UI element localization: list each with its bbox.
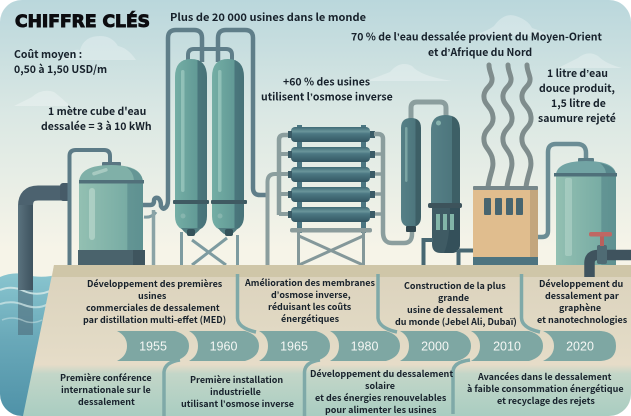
timeline text 1955: Développement des premières	[87, 277, 223, 290]
segment 1965: 1965	[280, 340, 308, 354]
timeline text 1965: d’osmose inverse,	[271, 288, 351, 301]
segment 1980	[330, 331, 400, 361]
timeline text 2010 lower: à faible consommation énergétique	[467, 382, 624, 395]
pipes behind equipment	[70, 30, 292, 265]
segment 2000: 2000	[421, 340, 449, 354]
timeline text 1955: par distillation multi-effet (MED)	[83, 313, 226, 326]
timeline text 2020: Développement du	[539, 277, 624, 290]
timeline connectors	[164, 274, 540, 416]
segment 1960	[189, 331, 259, 361]
timeline text 1980 lower: et des énergies renouvelables	[315, 391, 447, 404]
desalination tank left	[78, 162, 145, 265]
timeline text 1955: usines	[138, 289, 167, 302]
segment 1955	[117, 331, 189, 361]
membrane rack	[288, 125, 375, 265]
segment 2020	[543, 331, 616, 361]
segment 1980: 1980	[351, 340, 378, 354]
stat: saumure: 1 litre d’eau	[547, 66, 608, 81]
timeline text 1965: réduisant les coûts	[268, 300, 352, 313]
background clouds	[14, 15, 622, 106]
timeline text 1965: énergétiques	[281, 312, 340, 325]
timeline text 2000: grande	[438, 291, 469, 304]
timeline text 2010 lower: Avancées dans le dessalement	[477, 370, 612, 383]
segment 1965	[259, 331, 330, 361]
timeline text 1955: commerciales de dessalement	[86, 301, 220, 314]
stat: osmose inverse: utilisent l’osmose inverse	[261, 90, 393, 104]
stat: saumure: 1,5 litre de	[551, 96, 606, 111]
segment 2020: 2020	[566, 340, 594, 354]
timeline text 2020: et nanotechnologies	[537, 313, 628, 326]
stat: énergie: 1 mètre cube d'eau	[48, 104, 146, 119]
stat: saumure: saumure rejeté	[538, 111, 616, 126]
segment 1960: 1960	[210, 340, 237, 354]
stat: Moyen-Orient: et d’Afrique du Nord	[428, 45, 532, 60]
stat: énergie: dessalée = 3 à 10 kWh	[41, 119, 152, 134]
desalination tank right	[538, 144, 617, 265]
timeline text 2020: graphène	[559, 301, 601, 314]
stat: saumure: douce produit,	[539, 81, 615, 96]
timeline text 1980 lower: Développement du dessalement	[310, 367, 453, 380]
timeline text 1960 lower: Première installation	[190, 373, 283, 386]
timeline text 2000: usine de dessalement	[407, 303, 503, 316]
title: CHIFFRE CLÉS	[15, 10, 150, 32]
factory building	[473, 186, 538, 265]
timeline text 1965: Amélioration des membranes	[244, 276, 376, 289]
segment 1955: 1955	[139, 340, 167, 354]
valve	[589, 232, 631, 277]
segment 2010: 2010	[493, 340, 521, 354]
segment 2010	[471, 331, 543, 361]
timeline text 1955 lower: dessalement	[78, 395, 135, 408]
timeline text 2000: Construction de la plus	[404, 279, 506, 292]
big intake pipe	[18, 183, 70, 290]
timeline text 1955 lower: internationale sur le	[61, 383, 151, 396]
tall pressure vessels	[173, 59, 247, 236]
timeline text 2020: dessalement par	[545, 289, 619, 302]
stat: coût moyen: Coût moyen :	[14, 47, 82, 62]
timeline text 1960 lower: industrielle	[210, 385, 261, 398]
timeline text 1955 lower: Première conférence	[60, 371, 152, 384]
platform	[23, 265, 631, 416]
timeline text 1980 lower: pour alimenter les usines	[325, 403, 437, 416]
timeline text 2000: du monde (Jebel Ali, Dubaï)	[395, 315, 517, 328]
vessel support legs	[182, 232, 238, 265]
timeline text 1980 lower: solaire	[365, 379, 395, 392]
stat: osmose inverse: +60 % des usines	[283, 74, 370, 90]
stat: usines: Plus de 20 000 usines dans le monde	[170, 10, 366, 25]
stat: Moyen-Orient: 70 % de l’eau dessalée provient du Moyen-Orient	[351, 30, 602, 44]
filter columns	[401, 115, 474, 265]
timeline text 1960 lower: utilisant l’osmose inverse	[181, 397, 294, 410]
water	[0, 273, 52, 416]
stat: coût moyen: 0,50 à 1,50 USD/m	[14, 62, 107, 77]
timeline text 2010 lower: et recyclage des rejets	[497, 394, 595, 407]
timeline ribbon	[117, 331, 616, 361]
grey connecting pipes	[374, 102, 446, 243]
segment 2000	[400, 331, 471, 361]
smoke plumes	[484, 65, 531, 187]
